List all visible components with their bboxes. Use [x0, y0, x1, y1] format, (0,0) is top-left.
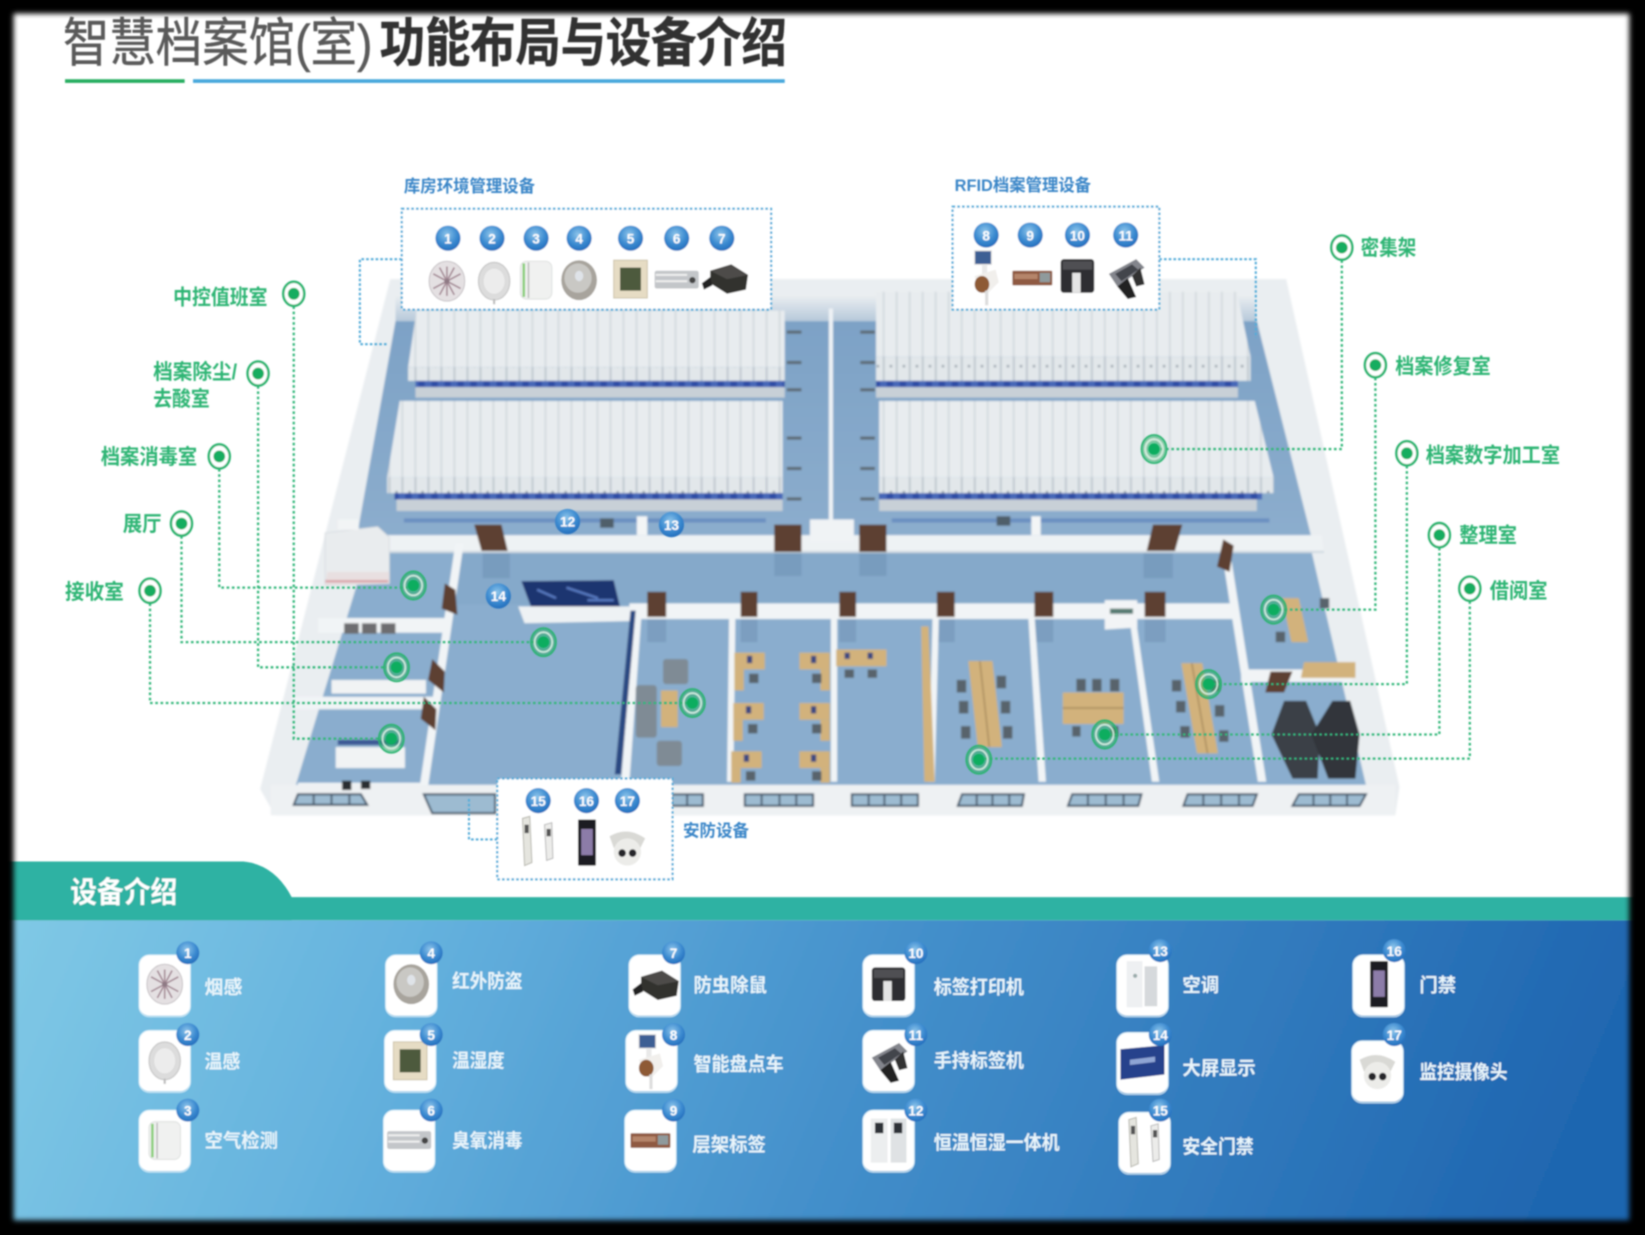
device panel background [0, 861, 1645, 1235]
screen wall [518, 606, 629, 623]
device 9 [625, 1099, 766, 1172]
device 2 [139, 1023, 240, 1092]
room label: 中控值班室 [173, 282, 304, 309]
device 15: 15 [1153, 1103, 1168, 1118]
large screen [521, 580, 620, 606]
callout: storage environment devices: 5 [627, 231, 635, 246]
device 6: 6 [427, 1103, 435, 1118]
callout: security devices: 17 [620, 794, 635, 809]
heading: device introduction: 设备介绍 [70, 876, 177, 909]
device 13: 空调 [1182, 974, 1219, 997]
callout: storage environment devices: 4 [575, 231, 583, 246]
device 15: 安全门禁 [1182, 1135, 1254, 1158]
device 12: 恒温恒湿一体机 [934, 1132, 1060, 1154]
device 8: 智能盘点车 [693, 1052, 784, 1075]
device 17 [1352, 1023, 1508, 1103]
device 7 [629, 941, 767, 1017]
device 9: 层架标签 [692, 1134, 766, 1156]
room label: 档案数字加工室: 档案数字加工室 [1426, 444, 1560, 468]
room label: 整理室: 整理室 [1459, 523, 1517, 547]
device 1: 1 [184, 946, 192, 961]
badges on map: 14 [491, 589, 506, 604]
device 12 [863, 1099, 1060, 1172]
device 7: 防虫除鼠 [693, 974, 767, 997]
building shell [260, 279, 1400, 815]
heading: storage environment devices: 库房环境管理设备 [404, 176, 535, 196]
shelf block: top right [876, 292, 1251, 398]
room label: 档案修复室: 档案修复室 [1395, 355, 1491, 379]
device 4: 红外防盗 [452, 969, 523, 992]
front windows [294, 794, 1366, 813]
dividing wall [380, 535, 1324, 553]
device 5: 温湿度 [452, 1049, 505, 1072]
room label: 档案除尘/去酸室 [153, 360, 269, 411]
reception kiosk [600, 516, 1041, 535]
glass partition [615, 611, 636, 774]
lower floor [296, 551, 1366, 785]
device 5 [384, 1023, 505, 1092]
device 13 [1117, 939, 1219, 1017]
device 1: 烟感 [205, 977, 242, 999]
callout: security devices: 16 [579, 794, 594, 809]
badges on map [486, 509, 684, 609]
room label: 借阅室: 借阅室 [1490, 579, 1547, 603]
room label: 展厅 [123, 512, 192, 536]
left room furniture [332, 623, 426, 790]
callout: RFID devices: 11 [1118, 228, 1133, 243]
room label: 密集架 [1331, 236, 1416, 260]
device 16 [1353, 939, 1456, 1017]
device 8: 8 [670, 1028, 678, 1043]
device 14: 大屏显示 [1182, 1057, 1256, 1079]
device 5: 5 [427, 1028, 435, 1043]
corridor shade [453, 553, 1227, 604]
device 8 [626, 1023, 784, 1092]
title: 智慧档案馆(室) [63, 14, 372, 73]
device 4 [386, 941, 523, 1017]
room label: 接收室 [65, 579, 161, 604]
front wall [271, 785, 1395, 815]
storage vent strip [404, 518, 1269, 523]
room label: 密集架: 密集架 [1361, 236, 1416, 260]
device 17: 监控摄像头 [1419, 1061, 1508, 1084]
callout: storage environment devices: 1 [444, 231, 452, 246]
device 1 [139, 941, 242, 1017]
room label: 档案除尘/去酸室: 去酸室 [153, 387, 210, 411]
heading: security devices: 安防设备 [683, 820, 749, 840]
device 14: 14 [1153, 1028, 1168, 1043]
badges on map: 13 [664, 518, 679, 533]
shelf block: lower left [387, 401, 783, 511]
callout: RFID devices [953, 207, 1159, 310]
device 6 [383, 1099, 523, 1172]
callout: storage environment devices: 7 [718, 231, 726, 246]
back wall shading [396, 296, 1257, 321]
device 15 [1119, 1099, 1254, 1174]
room label: 接收室: 接收室 [65, 580, 124, 604]
room label: 档案消毒室: 档案消毒室 [101, 445, 197, 469]
device 7: 7 [670, 946, 677, 961]
device 3 [139, 1099, 278, 1172]
heading: RFID devices: RFID档案管理设备 [955, 175, 1091, 195]
device 10 [863, 941, 1024, 1017]
doors [421, 525, 1292, 730]
room 5 table [1063, 600, 1137, 737]
left room walls [292, 544, 464, 797]
door reflections [483, 553, 1173, 642]
room label: 借阅室 [1459, 577, 1547, 603]
device 4: 4 [427, 946, 435, 961]
device 12: 12 [908, 1103, 924, 1118]
device 10: 10 [908, 946, 924, 961]
room label: 中控值班室: 中控值班室 [173, 285, 268, 309]
device 9: 9 [670, 1103, 678, 1118]
room label: 档案数字加工室 [1396, 441, 1560, 468]
callout: RFID devices: 9 [1026, 228, 1034, 243]
room label: 档案修复室 [1365, 353, 1491, 379]
device 16: 门禁 [1419, 975, 1456, 997]
callout: RFID devices: 8 [982, 228, 990, 243]
title: 功能布局与设备介绍 [380, 14, 787, 73]
window mullions [314, 794, 1347, 806]
storage floor [357, 321, 1311, 537]
callout: security devices: 15 [531, 794, 546, 809]
floor plan illustration [260, 279, 1400, 815]
callout: security devices [497, 779, 672, 879]
map markers [379, 435, 1286, 774]
device 17: 17 [1387, 1028, 1402, 1043]
title [63, 14, 787, 73]
device 2: 温感 [205, 1051, 240, 1073]
callout: storage environment devices: 6 [673, 231, 681, 246]
device 16: 16 [1387, 944, 1402, 959]
device 13: 13 [1153, 944, 1168, 959]
reading table and server racks [1272, 598, 1360, 779]
left utility cabinet [325, 519, 389, 585]
leader lines [150, 260, 1470, 759]
room 6 table [1172, 663, 1229, 753]
device 11: 11 [909, 1028, 923, 1043]
room label: 整理室 [1429, 523, 1517, 547]
shelf block: lower right [879, 401, 1274, 511]
device 2: 2 [184, 1028, 192, 1043]
room label: 展厅: 展厅 [123, 513, 162, 536]
device 14 [1117, 1023, 1256, 1094]
title underline [65, 79, 785, 83]
badges on map: 12 [560, 515, 576, 530]
callout: storage environment devices [402, 209, 771, 310]
office desks [731, 653, 830, 783]
center partition [829, 308, 833, 531]
callout: RFID devices: 10 [1070, 228, 1085, 243]
callout: storage environment devices: 2 [488, 231, 496, 246]
device 10: 标签打印机 [934, 977, 1024, 999]
room wall row [621, 561, 1352, 782]
device 6: 臭氧消毒 [452, 1130, 523, 1152]
device 11 [863, 1023, 1024, 1092]
lounge furniture [636, 659, 688, 766]
room label: 档案除尘/去酸室: 档案除尘/ [153, 360, 237, 384]
room 4 table [957, 661, 1012, 747]
room 3 desk and cabinet [836, 626, 935, 782]
callout: storage environment devices: 3 [532, 231, 540, 246]
shelf block: top left [408, 311, 785, 398]
device 11: 手持标签机 [934, 1050, 1024, 1072]
device 3: 3 [184, 1103, 192, 1118]
device 3: 空气检测 [205, 1129, 278, 1152]
aisle markers [787, 331, 875, 501]
callout connectors [360, 259, 1256, 839]
